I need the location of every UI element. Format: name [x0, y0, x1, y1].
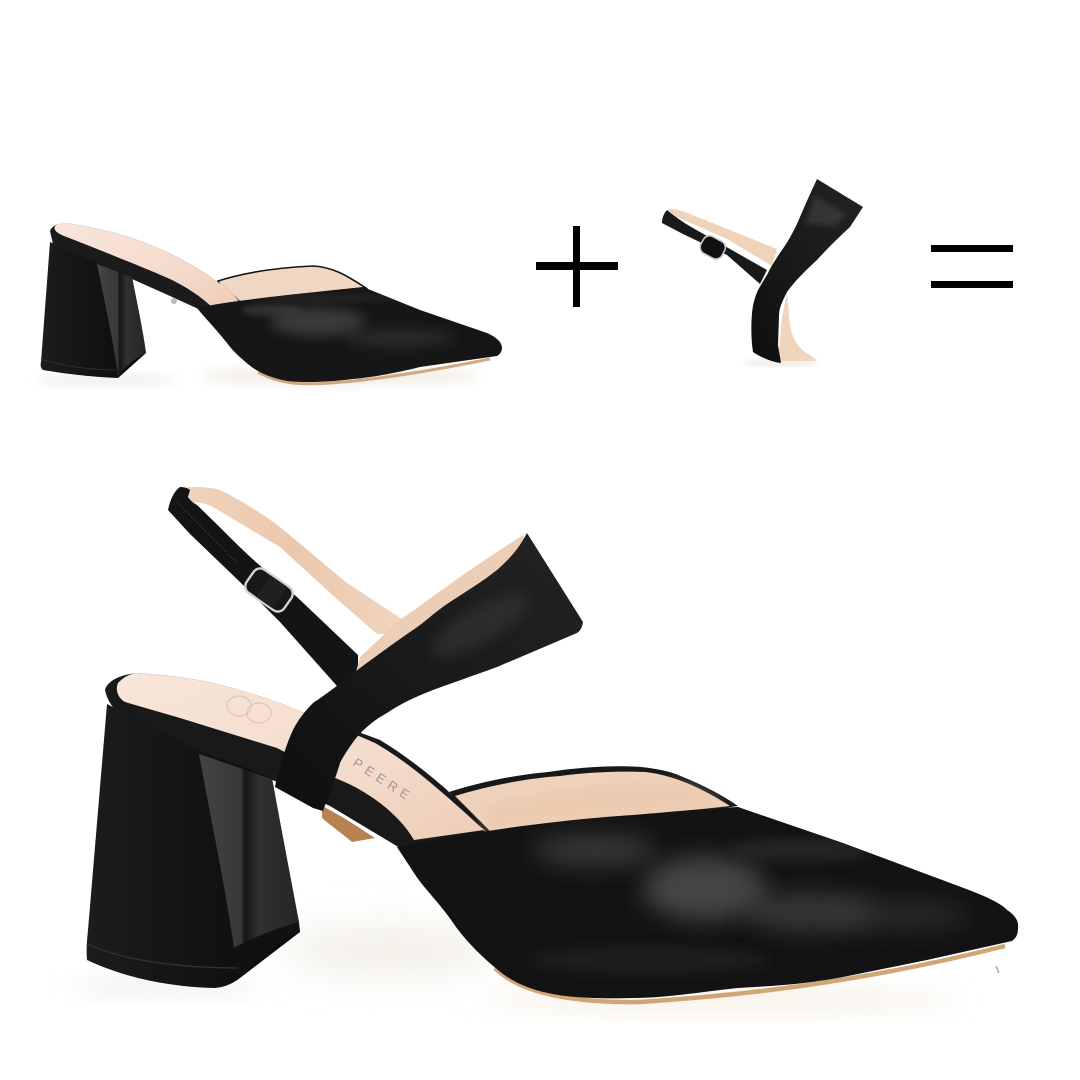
strap piece band — [751, 179, 863, 363]
strap piece thin band — [662, 210, 767, 284]
strap piece thin band lining — [668, 209, 777, 266]
small shoe vamp — [197, 287, 502, 382]
toe scuff mark — [996, 966, 999, 973]
wide strap lining — [356, 535, 525, 700]
small shoe insole — [50, 223, 241, 312]
strap piece sole pad — [778, 293, 816, 361]
wide strap — [275, 533, 583, 811]
heel — [87, 704, 300, 988]
vamp — [397, 807, 1018, 998]
brown tab under insole — [322, 806, 375, 842]
ankle strap lining — [187, 487, 402, 634]
small mule shoe — [41, 223, 502, 384]
insole brand lettering: PEERE — [350, 755, 416, 805]
small shoe hardware — [171, 298, 177, 304]
detachable strap — [662, 179, 863, 363]
ankle strap — [168, 487, 358, 686]
large combined shoe — [87, 487, 1018, 1002]
plus sign — [536, 226, 618, 307]
infographic canvas — [40, 179, 1018, 1016]
small shoe sole edge — [258, 359, 490, 384]
equals sign — [931, 245, 1013, 288]
vamp interior — [449, 766, 738, 834]
sole edge — [495, 946, 1005, 1002]
background shadows — [35, 360, 960, 1008]
insole logo — [227, 696, 271, 723]
ankle strap stitching — [177, 502, 238, 564]
small shoe vamp interior — [218, 266, 366, 306]
small shoe heel — [41, 242, 146, 378]
insole — [105, 673, 490, 848]
strap piece buckle — [698, 233, 728, 261]
strap piece highlight — [805, 196, 846, 226]
buckle — [242, 565, 296, 615]
